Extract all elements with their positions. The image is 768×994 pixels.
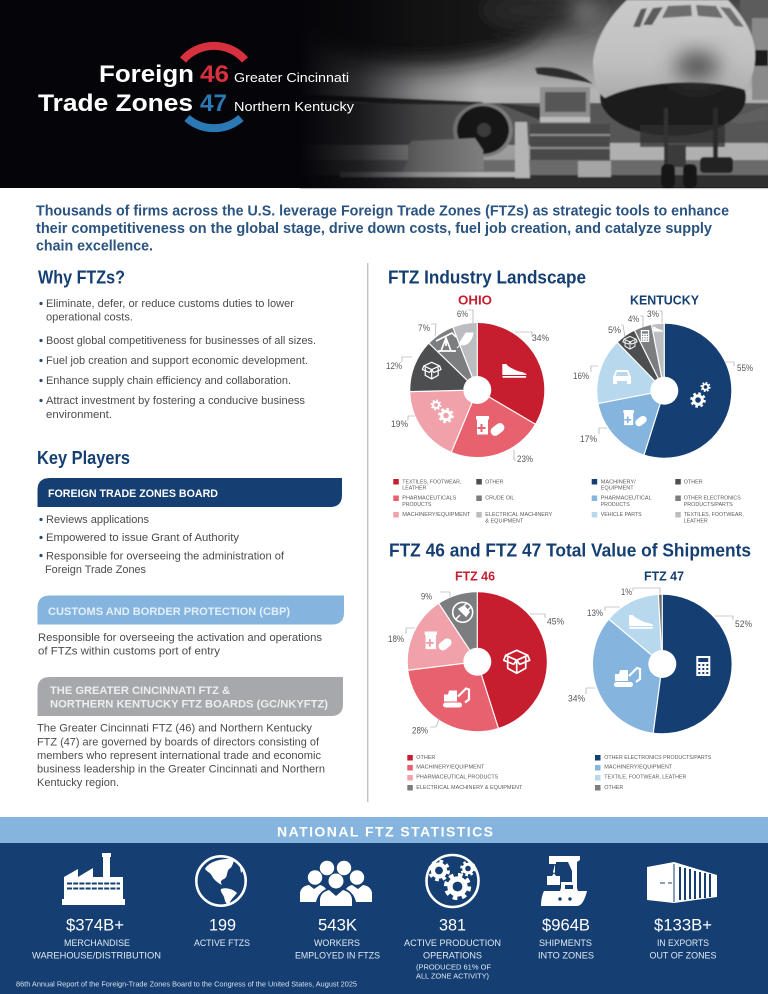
board bullet list: Responsible for overseeing the administration of	[46, 550, 285, 562]
stat: production operations: ACTIVE PRODUCTION	[404, 938, 501, 949]
Kentucky legend: VEHICLE PARTS	[601, 512, 642, 518]
icon: workers	[300, 861, 372, 906]
board bullet list: Reviews applications	[46, 514, 149, 526]
FTZ 47 slice icons	[614, 615, 710, 687]
logo	[38, 46, 355, 128]
Ohio percent labels: 23%	[517, 454, 533, 464]
FTZ 47 percent labels: 52%	[735, 619, 752, 629]
heading: Kentucky: KENTUCKY	[630, 293, 699, 308]
Ohio legend: TEXTILES, FOOTWEAR,	[402, 480, 462, 486]
stat: shipments: $964B	[542, 917, 590, 935]
panel: Foreign Trade Zones Board: FOREIGN TRADE ZONES BOARD	[48, 488, 218, 500]
FTZ 47 legend: MACHINERY/EQUIPMENT	[604, 765, 673, 771]
panel: GC/NKYFTZ boards: THE GREATER CINCINNATI FTZ &	[50, 685, 230, 697]
why FTZs bullet list: operational costs.	[46, 312, 133, 324]
FTZ 47 percent labels: 13%	[587, 608, 603, 618]
icon: globe	[196, 856, 246, 906]
panel: GC/NKYFTZ boards	[38, 677, 343, 716]
Kentucky legend: TEXTILES, FOOTWEAR,	[684, 512, 744, 518]
stat: merchandise warehouse: $374B+	[66, 917, 124, 935]
CBP description	[38, 632, 323, 658]
logo: Foreign	[99, 61, 194, 88]
FTZ 46 legend: MACHINERY/EQUIPMENT	[416, 765, 485, 771]
icon: crane and ship	[541, 856, 587, 906]
FTZ 46 percent labels: 45%	[547, 617, 564, 627]
Ohio legend: PRODUCTS	[402, 502, 431, 508]
Ohio slice icons	[422, 333, 526, 438]
FTZ 47 legend: OTHER	[604, 785, 623, 791]
stat: exports: $133B+	[654, 917, 712, 935]
CBP description: of FTZs within customs port of entry	[38, 646, 221, 658]
stat: shipments: INTO ZONES	[538, 950, 594, 961]
why FTZs bullet list: environment.	[46, 409, 112, 421]
hero banner photo	[0, 0, 768, 188]
Kentucky legend: MACHINERY/	[601, 480, 636, 486]
FTZ 47 legend: TEXTILE, FOOTWEAR, LEATHER	[604, 775, 686, 781]
FTZ 46 legend	[407, 755, 523, 791]
why FTZs bullet list	[39, 298, 316, 421]
panel: GC/NKYFTZ boards: NORTHERN KENTUCKY FTZ BOARDS (GC/NKYFTZ)	[50, 698, 328, 710]
FTZ 46 percent labels	[388, 591, 564, 735]
stat: workers: WORKERS	[314, 938, 360, 949]
icon: shipping container	[647, 862, 717, 903]
stat: shipments	[538, 917, 594, 961]
Ohio legend: CRUDE OIL	[485, 496, 515, 502]
stat: merchandise warehouse	[32, 917, 161, 961]
stat: exports: OUT OF ZONES	[650, 950, 716, 961]
Kentucky percent labels	[573, 309, 753, 444]
icon: factory	[62, 853, 125, 905]
column divider	[367, 263, 368, 802]
boards description: The Greater Cincinnati FTZ (46) and Northern Kentucky	[37, 723, 312, 735]
Kentucky slice icons	[613, 327, 710, 428]
stat: active FTZs: ACTIVE FTZS	[194, 938, 250, 949]
stat: active FTZs: 199	[209, 917, 236, 935]
Ohio legend: LEATHER	[402, 486, 426, 492]
stat: workers: EMPLOYED IN FTZS	[295, 950, 380, 961]
Ohio percent labels	[386, 309, 549, 464]
panel: Customs and Border Protection	[38, 596, 344, 624]
heading: Ohio: OHIO	[458, 293, 492, 308]
Ohio percent labels: 12%	[386, 361, 402, 371]
stat: production operations: ALL ZONE ACTIVITY)	[416, 971, 489, 980]
stat: production operations: (PRODUCED 61% OF	[416, 962, 491, 971]
logo: Greater Cincinnati	[234, 70, 349, 85]
FTZ 47 legend	[595, 755, 711, 791]
boards description: members who represent international trade and economic	[37, 750, 322, 762]
heading: FTZ Industry Landscape: FTZ Industry Landscape	[388, 268, 586, 288]
stat: shipments: SHIPMENTS	[539, 938, 592, 949]
FTZ 46 legend: OTHER	[416, 755, 435, 761]
CBP description: Responsible for overseeing the activation and operations	[38, 632, 323, 644]
Ohio legend: MACHINERY/EQUIPMENT	[402, 512, 471, 518]
board bullet list	[39, 514, 285, 576]
Ohio legend: ELECTRICAL MACHINERY	[485, 512, 552, 518]
icon: production gears	[426, 855, 478, 907]
Kentucky legend: PRODUCTS/PARTS	[684, 502, 733, 508]
intro text: chain excellence.	[36, 238, 153, 254]
stat: production operations: OPERATIONS	[423, 950, 482, 961]
panel: Foreign Trade Zones Board	[38, 478, 342, 507]
stat: exports: IN EXPORTS	[657, 938, 709, 949]
FTZ 46 percent labels: 18%	[388, 634, 404, 644]
panel: national statistics band: NATIONAL FTZ STATISTICS	[277, 824, 493, 840]
FTZ 47 percent labels: 1%	[621, 587, 632, 597]
Kentucky legend: EQUIPMENT	[601, 486, 634, 492]
boards description: business leadership in the Greater Cincinnati and Northern	[37, 763, 325, 775]
FTZ 46 slice icons	[425, 602, 530, 708]
Ohio percent labels: 6%	[457, 309, 468, 319]
boards description: Kentucky region.	[37, 777, 119, 789]
pie chart: FTZ 46	[408, 592, 525, 728]
stat: workers	[295, 917, 380, 961]
stat: merchandise warehouse: WAREHOUSE/DISTRIBUTION	[32, 950, 161, 961]
why FTZs bullet list: Attract investment by fostering a conducive business	[46, 395, 306, 407]
logo: Northern Kentucky	[234, 99, 355, 114]
FTZ 46 percent labels: 28%	[412, 725, 428, 735]
FTZ 46 legend: ELECTRICAL MACHINERY & EQUIPMENT	[416, 785, 523, 791]
why FTZs bullet list: Eliminate, defer, or reduce customs duties to lower	[46, 298, 294, 310]
FTZ 46 legend: PHARMACEUTICAL PRODUCTS	[416, 775, 498, 781]
intro text: Thousands of firms across the U.S. leverage Foreign Trade Zones (FTZs) as strategic tools to enhance	[36, 202, 729, 220]
Kentucky percent labels: 4%	[628, 314, 639, 324]
panel: national statistics band	[0, 817, 768, 994]
intro text	[36, 202, 729, 254]
heading: FTZ 46: FTZ 46	[455, 569, 495, 584]
FTZ 46 percent labels: 9%	[421, 591, 432, 601]
Ohio legend: PHARMACEUTICALS	[402, 496, 456, 502]
stat: workers: 543K	[318, 917, 357, 935]
Ohio legend: OTHER	[485, 480, 503, 486]
panel: Customs and Border Protection: CUSTOMS AND BORDER PROTECTION (CBP)	[48, 606, 290, 618]
Kentucky percent labels: 5%	[608, 325, 621, 335]
stat: exports	[650, 917, 716, 961]
heading: Key Players: Key Players	[37, 448, 130, 468]
logo: Trade Zones	[38, 90, 193, 117]
logo: 46	[200, 61, 229, 88]
stat: production operations	[404, 917, 501, 980]
FTZ 47 percent labels: 34%	[568, 694, 585, 704]
Ohio legend	[393, 479, 552, 524]
Kentucky percent labels: 55%	[737, 363, 753, 373]
Kentucky legend: LEATHER	[684, 518, 708, 524]
Kentucky percent labels: 16%	[573, 371, 589, 381]
stat: merchandise warehouse: MERCHANDISE	[64, 938, 130, 949]
Ohio percent labels: 19%	[391, 419, 408, 429]
pie chart: FTZ 47	[609, 594, 711, 733]
board bullet list: Empowered to issue Grant of Authority	[46, 532, 239, 544]
FTZ 47 percent labels	[568, 587, 752, 704]
pie chart: Ohio	[410, 322, 535, 452]
stat: production operations: 381	[439, 917, 466, 935]
Kentucky percent labels: 3%	[647, 309, 659, 319]
Ohio percent labels: 7%	[418, 323, 430, 333]
Ohio percent labels: 34%	[532, 333, 549, 343]
source footnote: 86th Annual Report of the Foreign-Trade Zones Board to the Congress of the United States, August 2025	[16, 979, 357, 988]
Kentucky legend: PHARMACEUTICAL	[601, 496, 652, 502]
stat: active FTZs	[194, 917, 250, 949]
why FTZs bullet list: Boost global competitiveness for businesses of all sizes.	[46, 335, 316, 347]
heading: FTZ 47: FTZ 47	[644, 569, 684, 584]
intro text: their competitiveness on the global stage, drive down costs, fuel job creation, and catalyze supply	[36, 220, 713, 237]
logo: 47	[200, 90, 227, 117]
Ohio legend: & EQUIPMENT	[485, 518, 524, 524]
heading: total value of shipments: FTZ 46 and FTZ 47 Total Value of Shipments	[389, 541, 751, 561]
Kentucky legend: OTHER ELECTRONICS	[684, 496, 741, 502]
Kentucky legend: OTHER	[684, 480, 703, 486]
Kentucky legend	[592, 479, 744, 524]
board bullet list: Foreign Trade Zones	[45, 564, 146, 576]
Kentucky percent labels: 17%	[580, 434, 597, 444]
Kentucky legend: PRODUCTS	[601, 502, 630, 508]
boards description	[37, 723, 325, 789]
FTZ 47 legend: OTHER ELECTRONICS PRODUCTS/PARTS	[604, 755, 711, 761]
boards description: FTZ (47) are governed by boards of directors consisting of	[37, 736, 320, 748]
heading: Why FTZs: Why FTZs?	[38, 268, 125, 288]
why FTZs bullet list: Fuel job creation and support economic development.	[46, 355, 308, 367]
pie chart: Kentucky	[598, 323, 712, 455]
why FTZs bullet list: Enhance supply chain efficiency and collaboration.	[46, 375, 291, 387]
